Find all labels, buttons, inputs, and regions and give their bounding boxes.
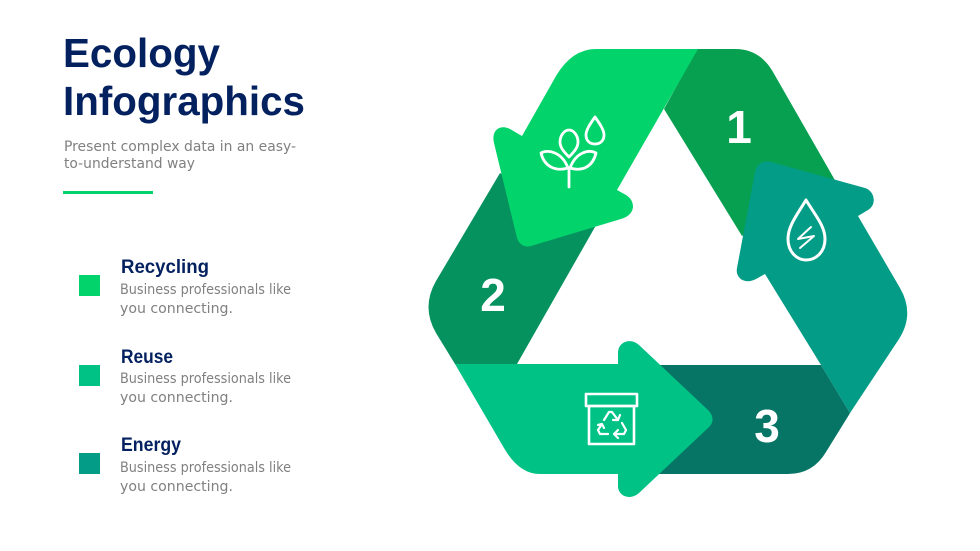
- number 1: 1: [726, 101, 752, 153]
- title: [63, 30, 305, 124]
- legend: energy: you connecting.: [120, 479, 233, 495]
- icon: energy drop: [788, 200, 825, 260]
- icon: plant with water drop: [541, 117, 604, 187]
- number 2: 2: [480, 269, 506, 321]
- legend: energy: Business professionals like: [120, 460, 291, 476]
- arrow: energy: [737, 161, 907, 413]
- arrow: reuse: [455, 341, 712, 497]
- title: Ecology: [63, 30, 220, 76]
- icon: recycling box: [586, 394, 637, 444]
- legend: energy: Energy: [121, 435, 181, 456]
- accent underline: [63, 191, 153, 194]
- subtitle: to-understand way: [64, 156, 195, 172]
- arrow: recycling: [493, 49, 698, 247]
- legend: recycling: you connecting.: [120, 301, 233, 317]
- subtitle: Present complex data in an easy-: [64, 139, 296, 155]
- legend: reuse: Reuse: [121, 347, 173, 368]
- legend: recycling: [79, 257, 291, 317]
- legend: recycling: Business professionals like: [120, 282, 291, 298]
- band 1: [664, 49, 836, 236]
- legend: recycling: Recycling: [121, 257, 209, 278]
- subtitle: [64, 139, 296, 172]
- recycling triangle diagram: [428, 49, 907, 497]
- legend: reuse: [79, 347, 291, 406]
- legend: energy: [79, 435, 291, 495]
- legend: reuse: you connecting.: [120, 390, 233, 406]
- legend: reuse: Business professionals like: [120, 371, 291, 387]
- number 3: 3: [754, 400, 780, 452]
- band 3: [640, 363, 881, 474]
- title: Infographics: [63, 78, 305, 124]
- band 2: [428, 173, 595, 364]
